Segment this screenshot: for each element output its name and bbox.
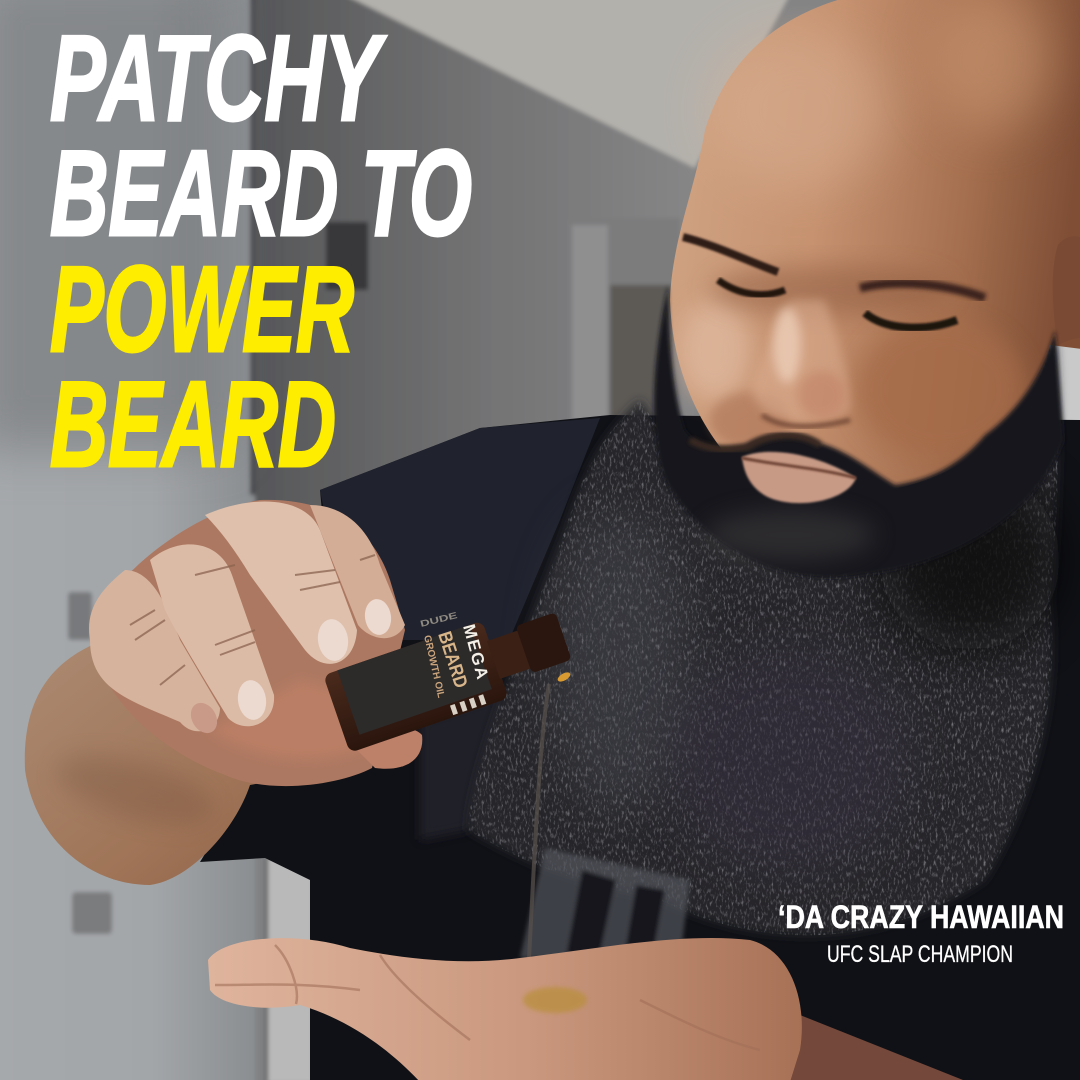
brows <box>683 237 778 272</box>
figure: bald head and face <box>654 0 1080 578</box>
back of hand and palm <box>92 500 405 786</box>
product: Mega Beard growth oil bottle: MEGA <box>459 622 492 681</box>
endorser title: UFC SLAP CHAMPION <box>827 941 1013 968</box>
ear <box>1053 236 1080 345</box>
product: Mega Beard growth oil bottle <box>323 597 577 960</box>
headline line: POWER: POWER <box>50 241 354 377</box>
middle finger <box>205 501 357 664</box>
figure: arm and pouring hand <box>25 500 422 885</box>
headline line: BEARD: BEARD <box>50 356 336 492</box>
face shading <box>679 265 1025 460</box>
figure: long grey beard <box>468 340 1060 935</box>
figure: black t-shirt <box>200 415 1080 1080</box>
product: Mega Beard growth oil bottle: BEARD <box>433 629 471 691</box>
index finger <box>310 505 405 638</box>
pinky finger <box>89 570 220 731</box>
ring finger <box>150 544 274 726</box>
headline line: BEARD TO: BEARD TO <box>50 125 472 261</box>
lips <box>742 452 856 503</box>
headline line: PATCHY: PATCHY <box>50 10 387 146</box>
shirt print <box>520 848 690 960</box>
figure: open receiving hand <box>208 938 968 1080</box>
nose <box>752 300 850 426</box>
moustache and chin beard <box>654 285 1064 578</box>
fingernails <box>186 597 393 738</box>
thumb <box>345 728 422 769</box>
product: Mega Beard growth oil bottle: DUDE <box>419 610 458 629</box>
product: Mega Beard growth oil bottle: GROWTH OIL <box>421 634 446 699</box>
knuckle creases <box>130 555 375 685</box>
eyes <box>718 280 785 295</box>
headline <box>50 10 472 492</box>
